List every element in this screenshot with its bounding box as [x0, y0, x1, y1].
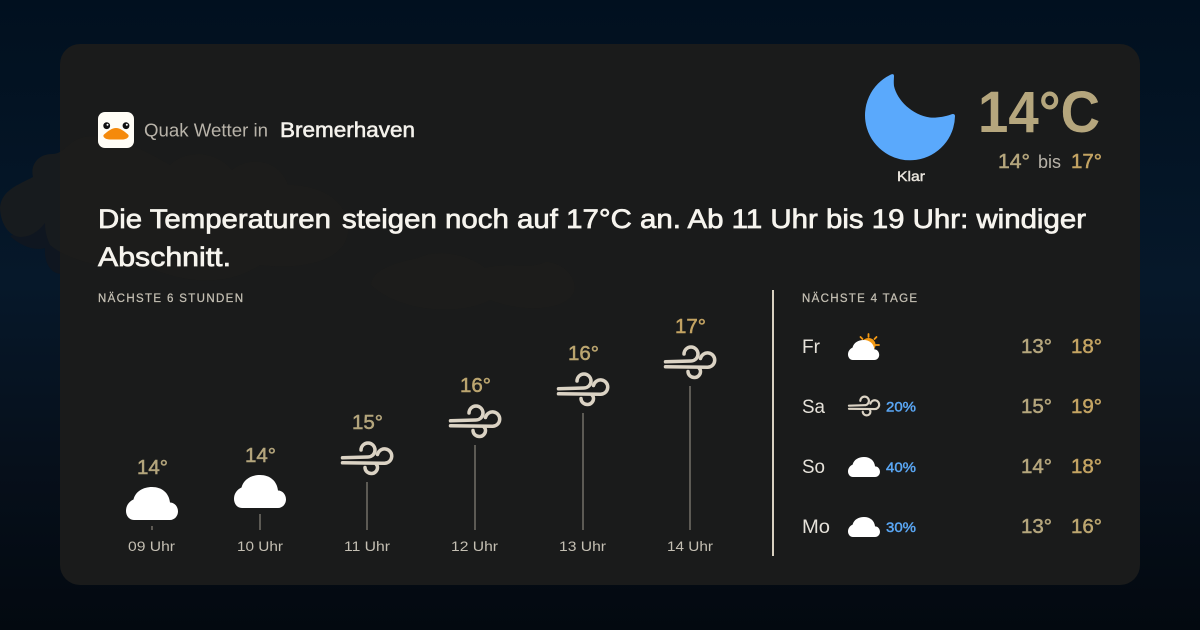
- panel: weather card: [60, 44, 1140, 585]
- hour 09: 09 Uhr: [128, 538, 175, 554]
- icon: moon: [865, 74, 955, 160]
- day: Friday: Fr: [802, 337, 821, 358]
- headline: steigen noch auf 17°C an. Ab 11 Uhr bis 19 Uhr: windiger: [342, 204, 1086, 234]
- hour 13: 16°: [568, 343, 599, 365]
- hour 12: 12 Uhr: [451, 538, 498, 554]
- hourly chart: [126, 316, 715, 554]
- condition label: Klar: [897, 168, 925, 184]
- day: Saturday: 19°: [1071, 396, 1102, 418]
- brand line: Quak Wetter in: [144, 120, 268, 140]
- hour 14: 17°: [675, 316, 706, 338]
- day: Sunday: [802, 456, 1102, 478]
- day: Friday: 18°: [1071, 336, 1102, 358]
- temperature range: 17°: [1071, 151, 1102, 173]
- hour 14: [666, 316, 715, 554]
- day: Friday: [802, 334, 1102, 360]
- day: Monday: Mo: [802, 517, 830, 538]
- hour 09: [126, 457, 178, 554]
- day: Sunday: 18°: [1071, 456, 1102, 478]
- heading: next 4 days: NÄCHSTE 4 TAGE: [802, 293, 917, 305]
- temperature range: 14°: [998, 151, 1030, 173]
- hour 11: 15°: [352, 412, 383, 434]
- day: Saturday: Sa: [802, 397, 825, 418]
- day: Sunday: So: [802, 457, 825, 478]
- day: Friday: 13°: [1021, 336, 1052, 358]
- day: Sunday: 14°: [1021, 456, 1052, 478]
- daily forecast: [802, 334, 1102, 538]
- heading: next 6 hours: NÄCHSTE 6 STUNDEN: [98, 293, 243, 305]
- day: Monday: [802, 516, 1102, 538]
- hour 14: 14 Uhr: [667, 538, 713, 554]
- icon: duck logo: [98, 112, 134, 148]
- headline: Abschnitt.: [98, 242, 231, 272]
- day: Monday: 16°: [1071, 516, 1102, 538]
- hour 11: 11 Uhr: [344, 538, 390, 554]
- faint cloud inside card: [0, 136, 575, 309]
- hour 13: [558, 343, 608, 554]
- hour 10: [234, 445, 286, 554]
- day: Sunday: 40%: [886, 460, 916, 475]
- temperature range: [998, 151, 1102, 173]
- hour 11: [342, 412, 392, 554]
- headline: Die Temperaturen: [98, 204, 331, 234]
- hour 13: 13 Uhr: [559, 538, 606, 554]
- hour 09: 14°: [137, 457, 168, 479]
- hour 12: 16°: [460, 375, 491, 397]
- day: Saturday: [802, 396, 1102, 418]
- hour 10: 14°: [245, 445, 276, 467]
- city name: Bremerhaven: [280, 119, 415, 142]
- background cloud: [0, 136, 348, 280]
- current temperature: 14°C: [978, 80, 1100, 145]
- day: Saturday: 15°: [1021, 396, 1052, 418]
- headline: [98, 204, 1086, 272]
- hour 10: 10 Uhr: [237, 538, 283, 554]
- temperature range: bis: [1038, 152, 1061, 172]
- day: Monday: 30%: [886, 520, 916, 535]
- day: Monday: 13°: [1021, 516, 1052, 538]
- day: Saturday: 20%: [886, 400, 916, 414]
- hour 12: [450, 375, 500, 554]
